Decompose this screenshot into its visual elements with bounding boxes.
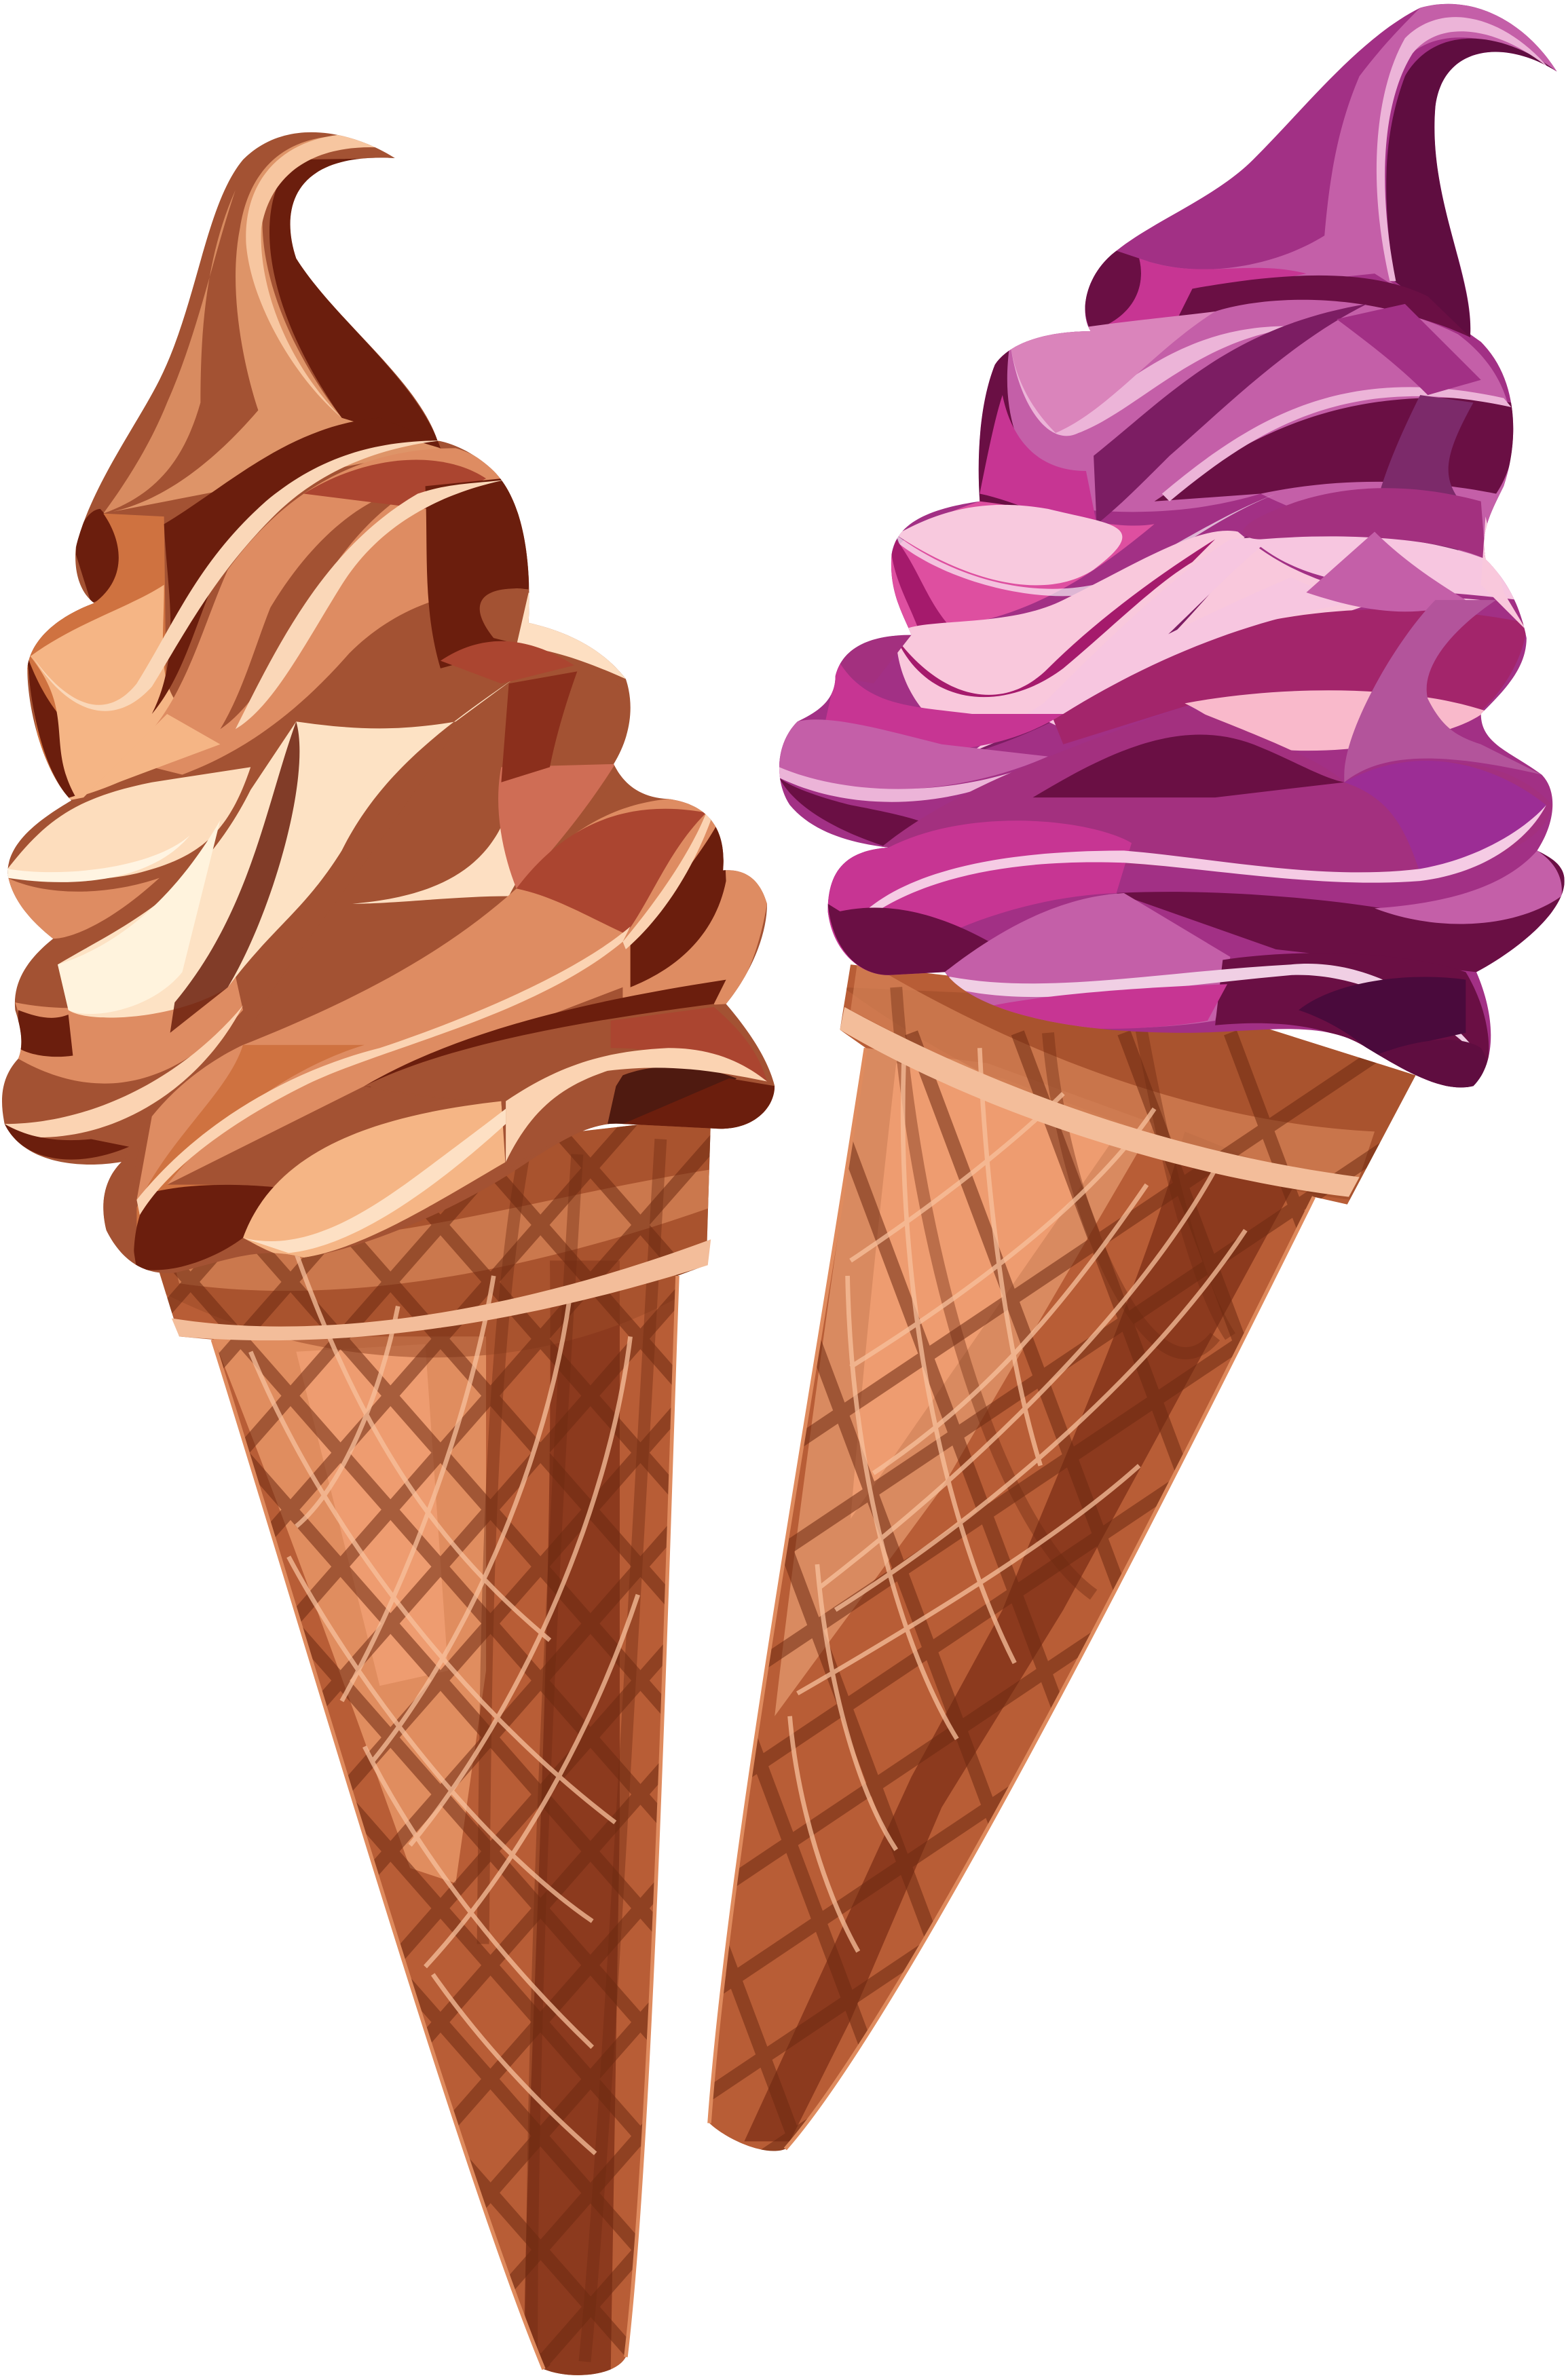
deep magenta swoosh through the pale swirl [980,536,1250,749]
left ice cream cone [0,121,790,2377]
left cone edge highlight [212,1276,677,2369]
right soft serve swirl [760,0,1565,1109]
right cone rim band [840,1007,1360,1197]
right cone edge highlight [709,1048,1314,2149]
right ice cream cone [707,4,1565,2151]
left waffle cone [160,1125,711,2375]
left soft serve swirl [0,121,790,1291]
left cone rim band [172,1239,711,1340]
right waffle cone [709,964,1416,2151]
